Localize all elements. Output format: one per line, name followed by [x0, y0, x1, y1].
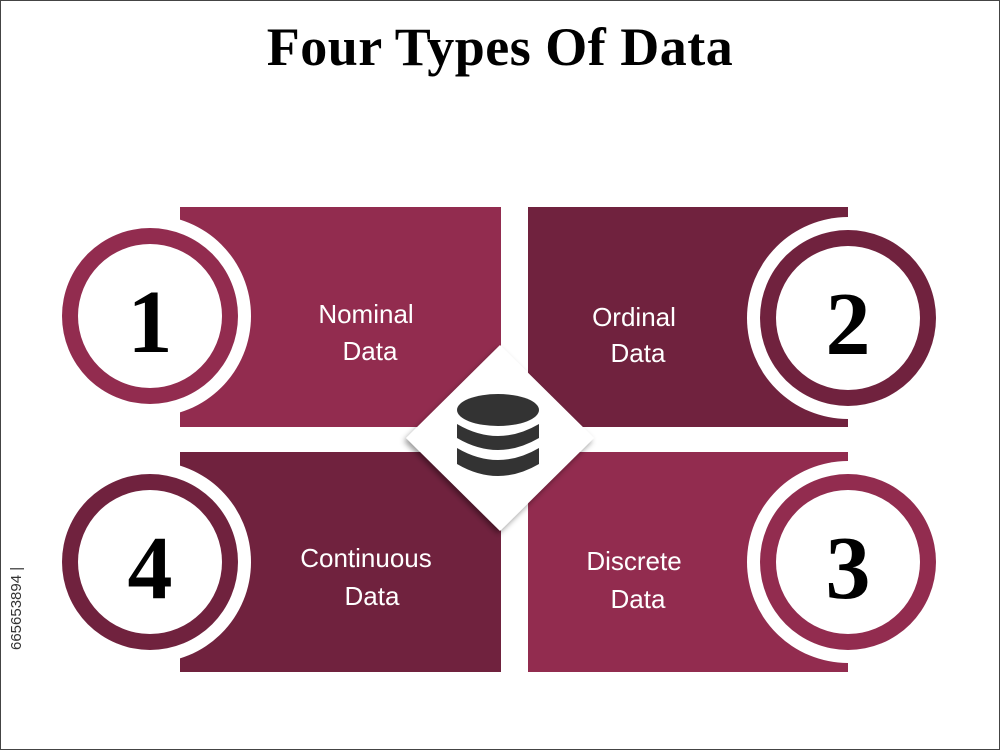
- panel 2: Ordinal Data: 2: [826, 275, 870, 374]
- panel 4: Continuous Data: [49, 452, 501, 672]
- panel 3: Discrete Data: 3: [826, 519, 870, 618]
- panel 3: Discrete Data: Data: [611, 584, 666, 614]
- panel 2: Ordinal Data: Data: [611, 338, 666, 368]
- side id text: 665653894 |: [8, 567, 25, 650]
- panel 4: Continuous Data: 4: [128, 519, 172, 618]
- panel 2: Ordinal Data: [528, 207, 949, 427]
- panel 1: Nominal Data: 1: [128, 273, 172, 372]
- panel 3: Discrete Data: Discrete: [586, 546, 682, 576]
- title: Four Types Of Data: [267, 17, 733, 77]
- panel 1: Nominal Data: Data: [343, 336, 398, 366]
- panel 1: Nominal Data: Nominal: [318, 299, 414, 329]
- panel 1: Nominal Data: [49, 207, 501, 427]
- panel 2: Ordinal Data: Ordinal: [592, 302, 676, 332]
- panel 3: Discrete Data: [528, 452, 949, 672]
- center diamond with database icon: [406, 345, 594, 531]
- panel 4: Continuous Data: Data: [345, 581, 400, 611]
- panel 4: Continuous Data: Continuous: [300, 543, 432, 573]
